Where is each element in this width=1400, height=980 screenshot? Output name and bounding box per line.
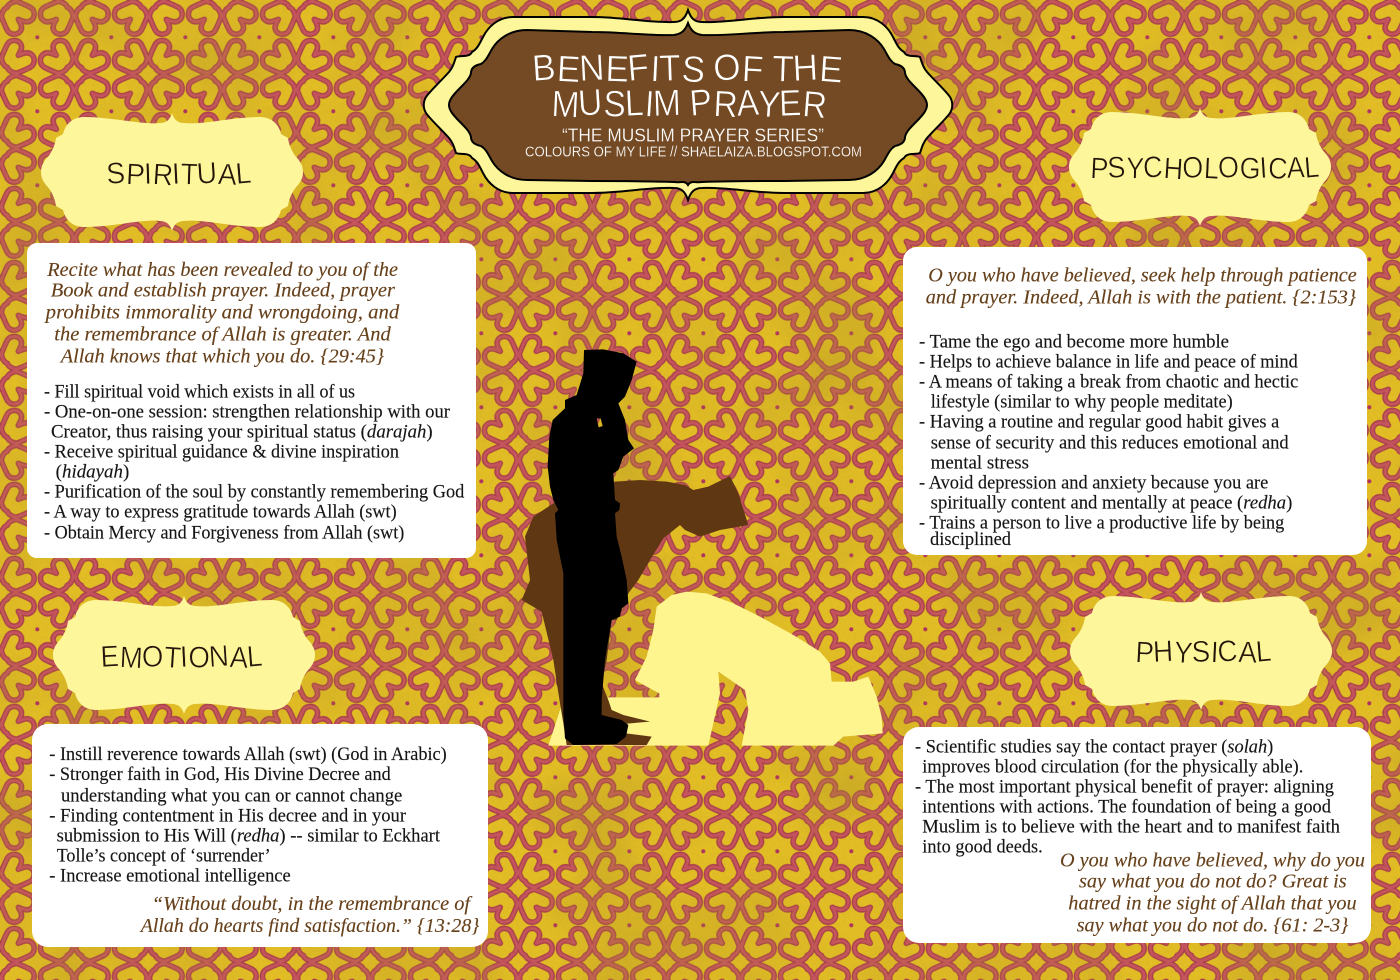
verse 29:45 bbox=[44, 259, 400, 368]
banner brown centre bbox=[449, 23, 927, 185]
physical benefits list: - The most important physical benefit of prayer: aligning bbox=[915, 777, 1334, 797]
verse 61:2-3: say what you do not do. {61: 2-3} bbox=[1077, 915, 1349, 937]
verse 13:28 bbox=[139, 893, 480, 937]
title banner bbox=[424, 10, 952, 200]
psychological benefits list: - Trains a person to live a productive life by being bbox=[919, 513, 1284, 533]
physical benefits list: - Scientific studies say the contact prayer (solah) bbox=[915, 737, 1273, 757]
title line 2: MUSLIM PRAYER bbox=[551, 81, 829, 126]
verse 29:45: prohibits immorality and wrongdoing, and bbox=[44, 302, 400, 324]
emotional benefits list bbox=[49, 745, 447, 886]
spiritual benefits list: - A way to express gratitude towards Allah (swt) bbox=[44, 502, 397, 522]
emotional benefits list: - Finding contentment in His decree and in your bbox=[49, 806, 406, 826]
verse 61:2-3: O you who have believed, why do you bbox=[1060, 850, 1365, 872]
heading plaque: emotional bbox=[53, 596, 315, 714]
verse 13:28: Allah do hearts find satisfaction.” {13:28} bbox=[139, 915, 480, 937]
spiritual benefits list: Creator, thus raising your spiritual status ( darajah) bbox=[51, 422, 433, 442]
heading plaque: psychological bbox=[1069, 108, 1331, 226]
emotional benefits list: understanding what you can or cannot change bbox=[61, 786, 402, 806]
psychological benefits list bbox=[919, 332, 1298, 550]
verse 2:153: and prayer. Indeed, Allah is with the patient. {2:153} bbox=[926, 286, 1357, 308]
spiritual benefits list: - Fill spiritual void which exists in all of us bbox=[44, 382, 355, 402]
spiritual benefits list: - Receive spiritual guidance & divine inspiration bbox=[44, 442, 399, 462]
panel: psychological bbox=[903, 247, 1367, 555]
spiritual benefits list: - Purification of the soul by constantly remembering God bbox=[44, 482, 465, 502]
psychological benefits list: spiritually content and mentally at peace (redha) bbox=[931, 493, 1292, 513]
silhouette: bowing figure bbox=[522, 476, 748, 745]
psychological benefits list: - A means of taking a break from chaotic and hectic bbox=[919, 372, 1298, 392]
heading plaque: emotional: EMOTIONAL bbox=[100, 640, 264, 675]
spiritual benefits list: (hidayah) bbox=[56, 462, 129, 482]
emotional benefits list: submission to His Will (redha) -- similar to Eckhart bbox=[57, 826, 441, 846]
panel: emotional bbox=[32, 724, 488, 947]
verse 29:45: Book and establish prayer. Indeed, prayer bbox=[51, 280, 396, 302]
psychological benefits list: mental stress bbox=[931, 453, 1029, 473]
emotional benefits list: - Instill reverence towards Allah (swt) (God in Arabic) bbox=[49, 745, 447, 765]
verse 61:2-3: hatred in the sight of Allah that you bbox=[1068, 893, 1357, 915]
spiritual benefits list bbox=[44, 382, 465, 543]
heading plaque: physical: PHYSICAL bbox=[1135, 635, 1273, 670]
spiritual benefits list: - One-on-one session: strengthen relationship with our bbox=[44, 402, 450, 422]
series subtitle: “THE MUSLIM PRAYER SERIES” bbox=[562, 126, 824, 146]
verse 13:28: “Without doubt, in the remembrance of bbox=[152, 893, 473, 915]
verse 29:45: Allah knows that which you do. {29:45} bbox=[59, 346, 385, 368]
verse 61:2-3: say what you do not do? Great is bbox=[1079, 871, 1347, 893]
banner frame bbox=[424, 10, 952, 200]
heading plaque: spiritual: SPIRITUAL bbox=[105, 157, 253, 192]
psychological benefits list: - Having a routine and regular good habit gives a bbox=[919, 412, 1279, 432]
psychological benefits list: sense of security and this reduces emotional and bbox=[931, 433, 1289, 453]
emotional benefits list: - Stronger faith in God, His Divine Decree and bbox=[49, 765, 391, 785]
silhouette: prostrating figure bbox=[548, 592, 883, 746]
verse 2:153: O you who have believed, seek help through patience bbox=[928, 264, 1357, 286]
verse 2:153 bbox=[926, 264, 1357, 308]
verse 61:2-3 bbox=[1060, 850, 1365, 937]
credit line: COLOURS OF MY LIFE // SHAELAIZA.BLOGSPOT.COM bbox=[525, 145, 862, 161]
physical benefits list: into good deeds. bbox=[922, 838, 1043, 858]
emotional benefits list: Tolle’s concept of ‘surrender’ bbox=[57, 846, 271, 866]
psychological benefits list: - Tame the ego and become more humble bbox=[919, 332, 1229, 352]
title line 1: BENEFITS OF THE bbox=[531, 46, 844, 91]
heading plaque: physical bbox=[1070, 592, 1332, 710]
psychological benefits list: lifestyle (similar to why people meditate) bbox=[931, 392, 1233, 412]
verse 29:45: the remembrance of Allah is greater. And bbox=[54, 324, 391, 346]
panel: physical bbox=[903, 727, 1371, 943]
heading plaque: spiritual bbox=[41, 113, 303, 231]
psychological benefits list: - Avoid depression and anxiety because you are bbox=[919, 473, 1268, 493]
silhouette: standing figure bbox=[548, 349, 637, 745]
panel: spiritual bbox=[27, 243, 476, 558]
verse 29:45: Recite what has been revealed to you of the bbox=[46, 259, 398, 281]
physical benefits list: improves blood circulation (for the physically able). bbox=[922, 757, 1303, 777]
physical benefits list bbox=[915, 737, 1340, 858]
psychological benefits list: - Helps to achieve balance in life and peace of mind bbox=[919, 352, 1298, 372]
psychological benefits list: disciplined bbox=[930, 530, 1012, 550]
emotional benefits list: - Increase emotional intelligence bbox=[49, 866, 291, 886]
physical benefits list: Muslim is to believe with the heart and to manifest faith bbox=[922, 818, 1340, 838]
heading plaque: psychological: PSYCHOLOGICAL bbox=[1090, 151, 1321, 186]
spiritual benefits list: - Obtain Mercy and Forgiveness from Allah (swt) bbox=[44, 523, 404, 543]
physical benefits list: intentions with actions. The foundation of being a good bbox=[922, 797, 1332, 817]
illustration: three prayer positions bbox=[522, 349, 883, 746]
